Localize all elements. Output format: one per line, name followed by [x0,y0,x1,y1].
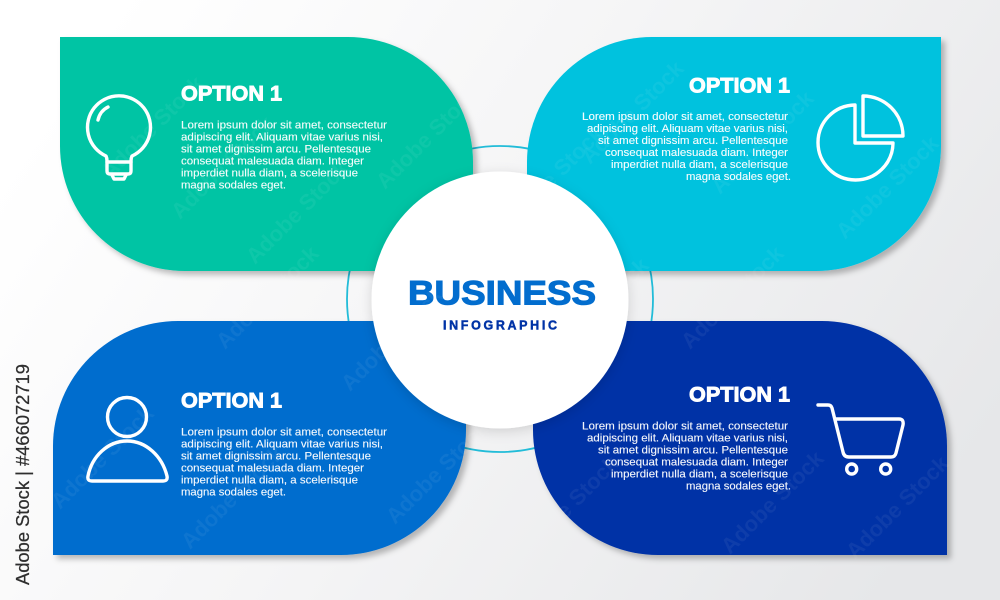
text block: top left: adipiscing elit. Aliquam vitae varius nisi, [181,132,383,144]
watermark: stock pattern: Adobe Stock [371,80,484,194]
icon: light bulb [88,96,151,179]
watermark: stock pattern: Adobe Stock [166,110,279,224]
text block: top left: imperdiet nulla diam, a scelerisque [181,168,358,180]
text block: bottom right: consequat malesuada diam. Integer [605,456,788,468]
text block: top left: consequat malesuada diam. Integer [181,156,364,168]
text block: top right [582,111,791,183]
text block: top right: magna sodales eget. [686,171,791,183]
panel: top right cyan [527,37,941,271]
text block: bottom left: magna sodales eget. [181,486,286,498]
connecting ring [347,146,653,452]
subtitle: infographic: INFOGRAPHIC [443,318,557,332]
watermark: stock pattern: Adobe Stock [381,415,494,529]
text block: top right: Lorem ipsum dolor sit amet, consectetur [582,111,788,123]
panel: bottom left blue [53,321,466,555]
watermark: stock pattern: Adobe Stock [211,240,324,354]
text block: bottom right: imperdiet nulla diam, a scelerisque [611,468,788,480]
watermark: stock pattern: Adobe Stock [706,85,819,199]
heading: option 1 bottom right: OPTION 1 [689,382,790,406]
text block: bottom left: consequat malesuada diam. Integer [181,462,364,474]
text block: top left [181,120,387,192]
text block: top right: consequat malesuada diam. Integer [605,147,788,159]
watermark: stock pattern: Adobe Stock [336,282,449,396]
text block: bottom right [582,420,791,492]
watermark: stock pattern: Adobe Stock [176,440,289,554]
text block: top right: imperdiet nulla diam, a scelerisque [611,159,788,171]
text block: bottom left [181,426,387,498]
text block: top left: Lorem ipsum dolor sit amet, consectetur [181,120,387,132]
text block: bottom left: adipiscing elit. Aliquam vitae varius nisi, [181,438,383,450]
icon: shopping cart [818,405,903,474]
text block: bottom left: sit amet dignissim arcu. Pellentesque [181,450,371,462]
watermark: stock pattern: Adobe Stock [241,155,354,269]
watermark: stock pattern: Adobe Stock [676,240,789,354]
title: business: BUSINESS [408,274,596,312]
watermark: stock pattern: Adobe Stock [96,70,209,184]
text block: bottom right: sit amet dignissim arcu. Pellentesque [598,444,788,456]
watermark: adobe stock id: Adobe Stock | #466072719 [13,364,33,585]
icon: person [88,398,167,481]
panel: top left green [60,37,473,271]
watermark: stock pattern: Adobe Stock [841,450,954,564]
text block: bottom left: Lorem ipsum dolor sit amet, consectetur [181,426,387,438]
watermark: stock pattern: Adobe Stock [496,120,609,234]
text block: bottom right: Lorem ipsum dolor sit amet, consectetur [582,420,788,432]
panel: bottom right navy [533,321,947,555]
text block: top right: sit amet dignissim arcu. Pellentesque [598,135,788,147]
text block: bottom left: imperdiet nulla diam, a scelerisque [181,474,358,486]
text block: top left: sit amet dignissim arcu. Pellentesque [181,144,371,156]
heading: option 1 top right: OPTION 1 [689,74,790,98]
watermark: stock pattern: Adobe Stock [831,130,944,244]
watermark: stock pattern: Adobe Stock [46,400,159,514]
watermark: stock pattern: Adobe Stock [541,252,654,366]
watermark: stock pattern: Adobe Stock [716,445,829,559]
text block: bottom right: adipiscing elit. Aliquam vitae varius nisi, [587,432,788,444]
icon: pie chart [818,96,903,180]
heading: option 1 top left: OPTION 1 [181,82,282,106]
text block: top right: adipiscing elit. Aliquam vitae varius nisi, [587,123,788,135]
center circle with title [372,172,628,428]
watermark: stock pattern: Adobe Stock [576,55,689,169]
text block: bottom right: magna sodales eget. [686,480,791,492]
text block: top left: magna sodales eget. [181,180,286,192]
heading: option 1 bottom left: OPTION 1 [181,388,282,412]
watermark: stock pattern: Adobe Stock [511,450,624,564]
